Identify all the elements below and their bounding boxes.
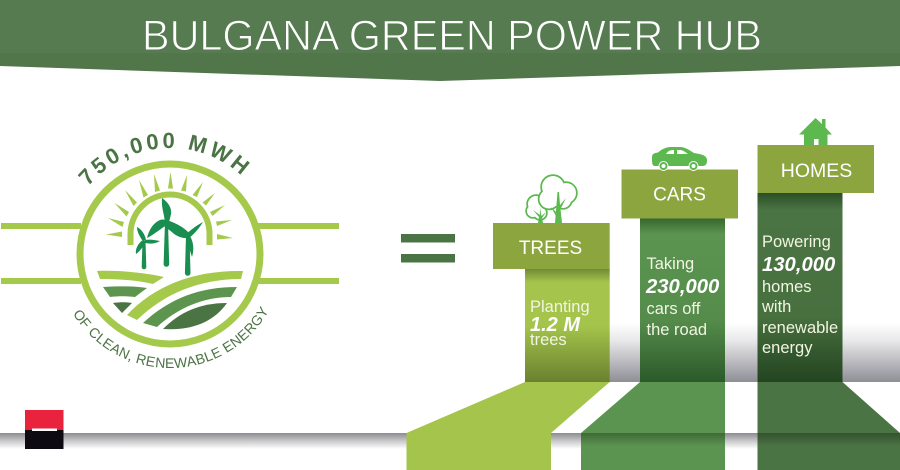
homes body text: 130,000 — [762, 254, 836, 276]
cars body text: 230,000 — [645, 276, 720, 298]
title: BULGANA GREEN POWER HUB — [142, 12, 762, 60]
icon: car — [652, 147, 707, 170]
homes label box — [758, 145, 874, 193]
homes body text: homes — [762, 278, 812, 296]
homes body text — [761, 233, 838, 357]
gray horizon band behind columns — [525, 323, 900, 382]
connector lines through the badge — [1, 223, 339, 284]
homes floor shadow — [758, 433, 900, 446]
homes floor — [758, 382, 900, 470]
headline arc text: 750,000 MWH — [78, 132, 250, 184]
cars label box — [622, 170, 738, 218]
homes body text: renewable — [762, 319, 838, 337]
equals sign — [401, 234, 455, 262]
cars body text: cars off — [646, 300, 701, 318]
logo — [25, 410, 64, 449]
cars body text: Taking — [646, 255, 694, 273]
homes body text: Powering — [762, 233, 831, 251]
trees body text: trees — [530, 331, 567, 349]
header banner — [0, 0, 900, 81]
cars label: CARS — [653, 184, 706, 206]
icon: wind turbines — [136, 198, 203, 276]
icon: house — [799, 118, 832, 145]
icon: fields — [97, 271, 243, 329]
cars body text — [645, 255, 720, 339]
column: trees — [406, 176, 610, 470]
trees floor — [406, 382, 610, 470]
trees body text — [530, 298, 590, 349]
trees body text: 1.2 M — [530, 314, 581, 336]
cars pillar — [640, 218, 725, 382]
column: homes — [758, 118, 900, 470]
trees label box — [493, 223, 610, 269]
cars body text: the road — [646, 321, 707, 339]
cars floor shadow — [581, 433, 725, 446]
gray floor shadow band — [0, 433, 900, 449]
trees body text: Planting — [530, 298, 590, 316]
icon: sun — [106, 172, 233, 245]
homes body text: with — [761, 298, 791, 316]
trees pillar — [525, 269, 610, 382]
sub arc text: OF CLEAN, RENEWABLE ENERGY — [74, 306, 267, 368]
column: cars — [581, 147, 738, 470]
badge: 750,000 MWh of clean energy — [74, 132, 267, 368]
homes label: HOMES — [781, 160, 852, 182]
homes body text: energy — [762, 339, 813, 357]
icon: tree — [527, 176, 576, 223]
homes pillar — [758, 193, 842, 382]
cars floor — [581, 382, 725, 470]
trees label: TREES — [519, 238, 582, 259]
badge ring — [80, 164, 260, 344]
